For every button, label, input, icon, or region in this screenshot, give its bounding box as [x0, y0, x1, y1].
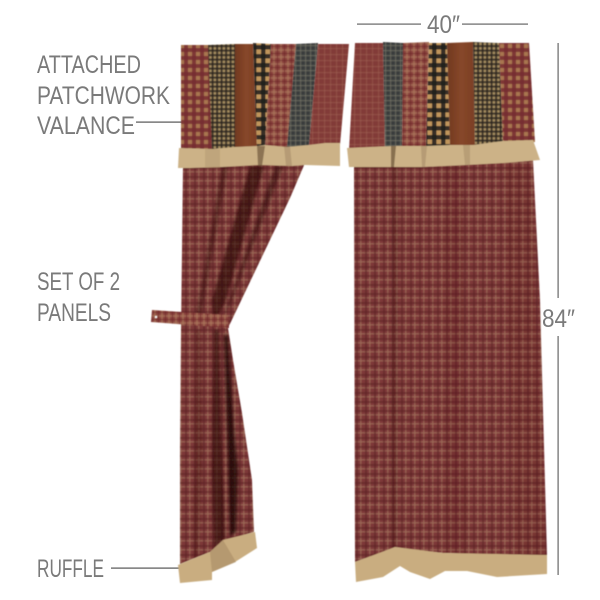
- tieback strap: [151, 310, 229, 328]
- label: set of 2 panels: [37, 268, 120, 327]
- label: ruffle: RUFFLE: [37, 555, 104, 583]
- left panel fold shading: [194, 166, 283, 558]
- right patchwork valance strips: [349, 42, 535, 150]
- left valance ruffle: [178, 143, 340, 168]
- label: set of 2 panels: PANELS: [37, 299, 111, 327]
- right curtain panel: [347, 42, 547, 582]
- label: attached patchwork valance: VALANCE: [37, 112, 135, 140]
- left patchwork valance strips: [181, 43, 349, 150]
- label: attached patchwork valance: [37, 51, 182, 140]
- left panel bottom ruffle: [178, 532, 257, 583]
- dimension: length 84 inches: 84″: [542, 305, 575, 333]
- right panel main fabric: [354, 160, 547, 562]
- label: set of 2 panels: SET OF 2: [37, 268, 120, 296]
- left panel drape: [180, 163, 305, 564]
- right panel bottom ruffle: [355, 547, 547, 582]
- label: attached patchwork valance: ATTACHED: [37, 51, 141, 79]
- right valance ruffle: [347, 140, 540, 167]
- left curtain panel, tied back: [151, 43, 349, 583]
- right panel fold shading: [392, 165, 546, 555]
- label: attached patchwork valance: PATCHWORK: [37, 82, 170, 110]
- dimension: width 40 inches: 40″: [427, 11, 460, 39]
